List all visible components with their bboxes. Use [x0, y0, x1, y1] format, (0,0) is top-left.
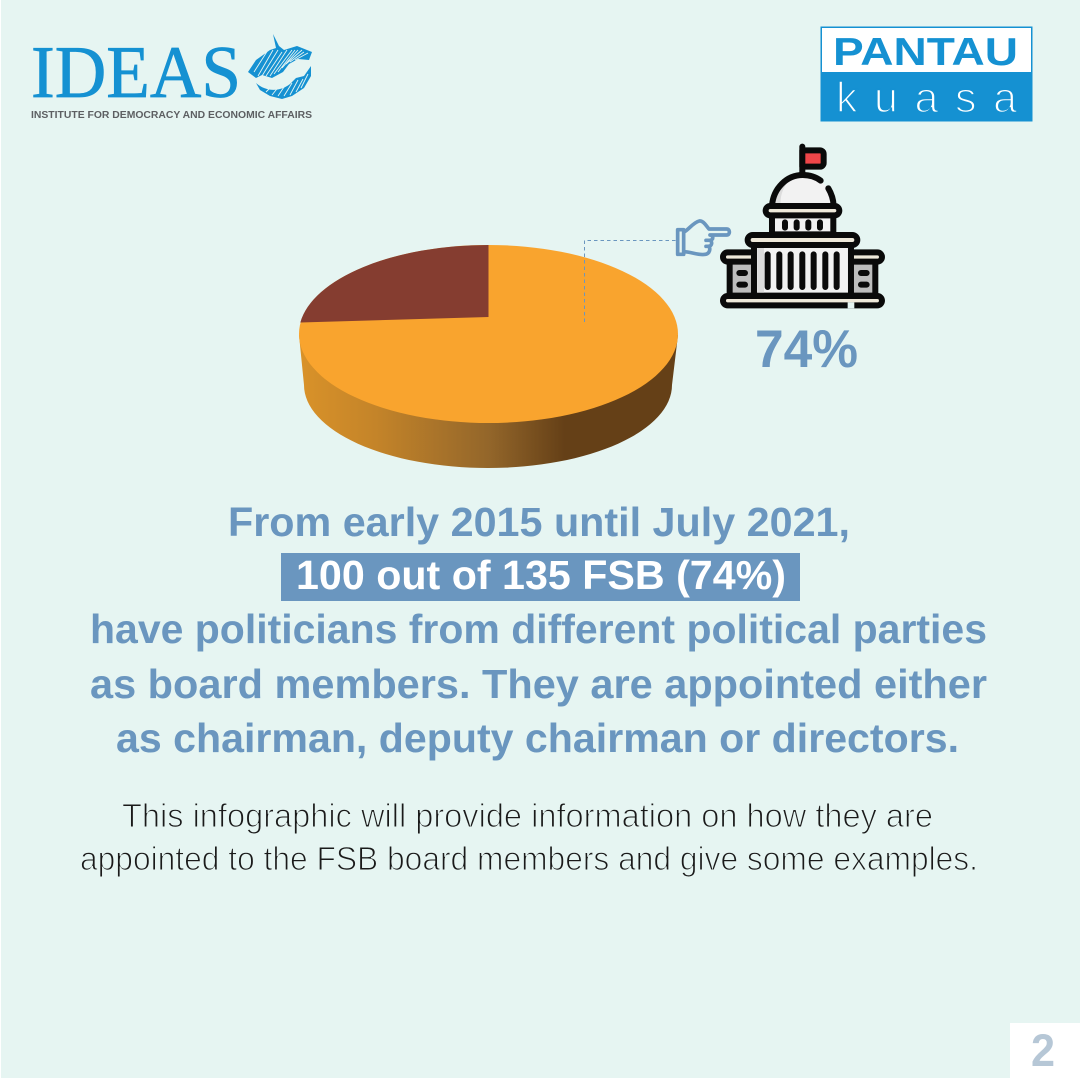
logo: IDEAS [31, 32, 312, 121]
body line 2: appointed to the FSB board members and give some examples. [80, 840, 978, 877]
pie chart [299, 245, 678, 468]
pie slice: remainder [300, 245, 488, 322]
dashed leader line [584, 240, 677, 322]
page number [1010, 1023, 1080, 1080]
left wing [723, 252, 756, 296]
dome [772, 175, 834, 206]
roof band [748, 235, 857, 245]
logo white panel [822, 28, 1031, 72]
dome band [766, 206, 839, 215]
body line 1: This infographic will provide information on how they are [122, 797, 933, 834]
logo: hatched bird [248, 34, 312, 99]
pie side wall [299, 335, 678, 468]
icon: pointing hand [678, 221, 729, 255]
pie slice: 74% [299, 245, 678, 423]
main hall [754, 244, 851, 296]
logo word: PANTAU: PANTAU [833, 31, 1018, 74]
right wing [849, 252, 882, 296]
logo wordmark: IDEAS [31, 32, 241, 114]
base [723, 296, 882, 308]
page number: 2 [1031, 1025, 1055, 1076]
headline line 1: From early 2015 until July 2021, [228, 499, 850, 545]
icon: capitol building [723, 147, 882, 308]
headline line 5: as chairman, deputy chairman or directors. [116, 715, 959, 761]
body text [80, 797, 978, 877]
logo frame [820, 26, 1032, 122]
drum [772, 215, 833, 234]
flag [802, 147, 824, 173]
headline line 4: as board members. They are appointed either [90, 661, 987, 707]
stat: 74%: 74% [755, 320, 858, 379]
logo: PANTAU kuasa [820, 26, 1032, 122]
headline line 3: have politicians from different political parties [90, 606, 987, 652]
headline [90, 499, 987, 761]
logo tagline: INSTITUTE FOR DEMOCRACY AND ECONOMIC AFFAIRS [31, 109, 312, 121]
logo word: kuasa: kuasa [836, 74, 1017, 122]
highlight bar: 100 out of 135 FSB (74%) [296, 552, 786, 598]
